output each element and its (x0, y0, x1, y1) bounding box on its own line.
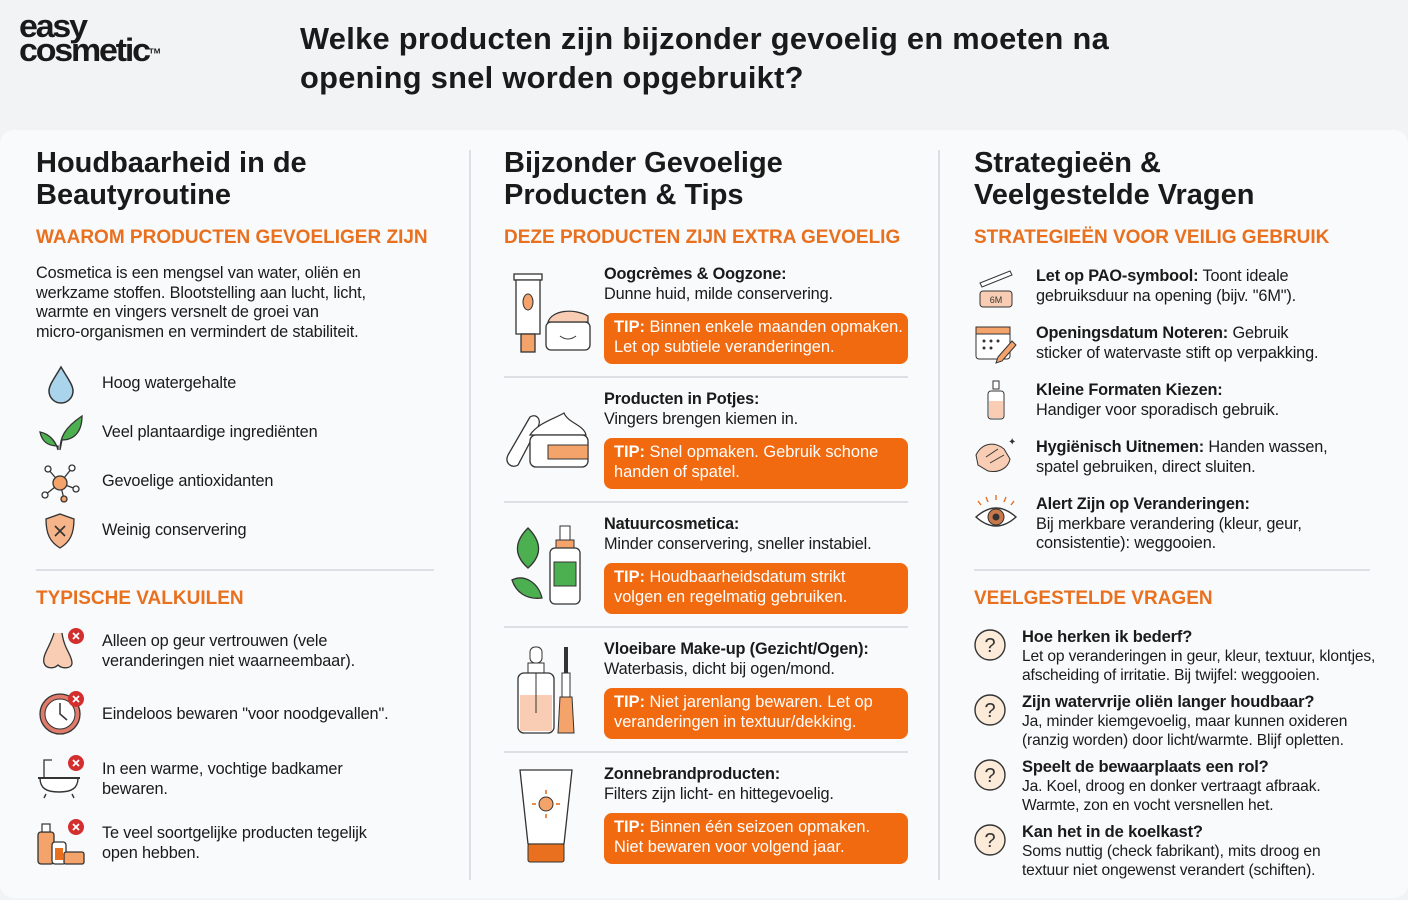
tip: TIP: Binnen enkele maanden opmaken. (614, 318, 903, 336)
faq 3: Warmte, zon en vocht versnellen het. (1022, 797, 1273, 814)
faq 2 (974, 693, 1347, 749)
icon: calendar (976, 326, 1017, 364)
tip: TIP: Houdbaarheidsdatum strikt (614, 568, 845, 586)
list: strategies: gebruiksduur na opening (bijv. "6M"). (1036, 287, 1296, 305)
list: factors (39, 366, 317, 549)
item: zonnebrand (519, 765, 908, 864)
icon: PAO: 6M (990, 295, 1002, 305)
faq 4: ? (984, 830, 996, 852)
item: vloeibare make-up: Waterbasis, dicht bij ogen/mond. (604, 660, 835, 678)
panel: strategieen (974, 147, 1375, 879)
item: potjes (506, 390, 908, 489)
icon: hands (976, 437, 1016, 472)
logo: cosmeticTM (19, 32, 160, 68)
list: valkuilen: bewaren. (102, 780, 168, 798)
item: vloeibare make-up (517, 640, 908, 739)
faq 2: Zijn watervrije oliën langer houdbaar? (1022, 693, 1314, 711)
faq 4: Soms nuttig (check fabrikant), mits droog en (1022, 843, 1320, 860)
faq 4: Kan het in de koelkast? (1022, 823, 1203, 841)
list: strategies: consistentie): weggooien. (1036, 534, 1216, 552)
icon: leaves and bottle (511, 526, 581, 605)
faq 4 (974, 823, 1320, 879)
heading (36, 147, 307, 211)
text block (36, 264, 366, 341)
list: strategies: Hygiënisch Uitnemen: Handen wassen, (1036, 438, 1328, 456)
faq 3: Ja. Koel, droog en donker vertraagt afbraak. (1022, 778, 1321, 795)
item: vloeibare make-up: Vloeibare Make-up (Gezicht/Ogen): (604, 640, 869, 658)
list: strategies: spatel gebruiken, direct sluiten. (1036, 458, 1256, 476)
item: potjes: Vingers brengen kiemen in. (604, 410, 798, 428)
tip: TIP: Niet jarenlang bewaren. Let op (614, 693, 873, 711)
text block: werkzame stoffen. Blootstelling aan lucht, licht, (36, 284, 366, 302)
heading: Houdbaarheid in de (36, 147, 307, 179)
item: natuurcosmetica: Minder conservering, sneller instabiel. (604, 535, 871, 553)
list: strategies: Let op PAO-symbool: Toont ideale (1036, 267, 1288, 285)
icon: molecule (41, 464, 80, 503)
logo (19, 9, 160, 68)
subheading: STRATEGIEËN VOOR VEILIG GEBRUIK (974, 227, 1329, 248)
list: strategies: Bij merkbare verandering (kleur, geur, (1036, 515, 1302, 533)
item: zonnebrand: Zonnebrandproducten: (604, 765, 780, 783)
item: potjes: Producten in Potjes: (604, 390, 759, 408)
subheading: DEZE PRODUCTEN ZIJN EXTRA GEVOELIG (504, 227, 900, 248)
icon: small bottle (988, 380, 1004, 420)
item: zonnebrand: Filters zijn licht- en hittegevoelig. (604, 785, 834, 803)
tip (604, 813, 908, 864)
text block: Cosmetica is een mengsel van water, oliën en (36, 264, 361, 282)
icon: bathtub (38, 755, 84, 798)
list: factors: Weinig conservering (102, 521, 246, 539)
tip: Let op subtiele veranderingen. (614, 338, 835, 356)
list: valkuilen: Te veel soortgelijke producten tegelijk (102, 824, 367, 842)
text block: micro-organismen en vermindert de stabiliteit. (36, 323, 358, 341)
list: strategies: Openingsdatum Noteren: Gebruik (1036, 324, 1288, 342)
text block: warmte en vingers versnelt de groei van (36, 303, 319, 321)
faq 3: ? (984, 765, 996, 787)
panel: houdbaarheid (36, 147, 434, 865)
subheading: WAAROM PRODUCTEN GEVOELIGER ZIJN (36, 227, 428, 248)
subheading: faq: VEELGESTELDE VRAGEN (974, 588, 1213, 609)
faq 1: afscheiding of irritatie. Bij twijfel: weggooien. (1022, 667, 1320, 684)
faq 1: Let op veranderingen in geur, kleur, textuur, klontjes, (1022, 648, 1375, 665)
list: strategies: Kleine Formaten Kiezen: (1036, 381, 1223, 399)
tip (604, 688, 908, 739)
tip: TIP: Binnen één seizoen opmaken. (614, 818, 870, 836)
item: oogcremes (513, 265, 908, 364)
icon: PAO (979, 270, 1013, 308)
icon: eye cream (513, 273, 591, 353)
list: strategies: Alert Zijn op Veranderingen: (1036, 495, 1250, 513)
faq 2: ? (984, 700, 996, 722)
list: valkuilen: Eindeloos bewaren "voor noodgevallen". (102, 705, 388, 723)
list: strategies: Handiger voor sporadisch gebruik. (1036, 401, 1279, 419)
list: valkuilen: veranderingen niet waarneembaar). (102, 652, 355, 670)
faq 4: textuur niet ongewenst verandert (schiften). (1022, 862, 1315, 879)
faq 3 (974, 758, 1321, 814)
item: natuurcosmetica (511, 515, 908, 614)
tip (604, 313, 908, 364)
icon: bottles (37, 819, 85, 865)
icon: dropper and mascara (517, 646, 574, 734)
panel: gevoelige producten (504, 147, 908, 864)
icon: eye (975, 495, 1017, 527)
tip: Niet bewaren voor volgend jaar. (614, 838, 845, 856)
list: strategies: sticker of watervaste stift op verpakking. (1036, 344, 1318, 362)
list: valkuilen: In een warme, vochtige badkamer (102, 760, 343, 778)
faq 3: Speelt de bewaarplaats een rol? (1022, 758, 1269, 776)
heading (504, 147, 783, 211)
title: Welke producten zijn bijzonder gevoelig en moeten na (300, 21, 1109, 56)
heading: Producten & Tips (504, 179, 744, 211)
subheading: valkuilen: TYPISCHE VALKUILEN (36, 588, 244, 609)
list: valkuilen: open hebben. (102, 844, 200, 862)
icon: drop (48, 366, 74, 404)
icon: shield (45, 513, 75, 549)
icon: leaf (39, 414, 83, 450)
icon: hands: ✦ (1008, 437, 1016, 448)
icon: sunscreen tube (519, 769, 573, 862)
title (300, 21, 1109, 95)
tip (604, 438, 908, 489)
list: factors: Gevoelige antioxidanten (102, 472, 273, 490)
faq 1: Hoe herken ik bederf? (1022, 628, 1192, 646)
item: oogcremes: Oogcrèmes & Oogzone: (604, 265, 786, 283)
faq 1 (974, 628, 1375, 684)
icon: nose (43, 628, 84, 668)
tip: veranderingen in textuur/dekking. (614, 712, 856, 730)
tip (604, 563, 908, 614)
heading (974, 147, 1254, 211)
tip: handen of spatel. (614, 462, 740, 480)
list: faq (974, 628, 1375, 879)
logo: easy (19, 9, 86, 45)
list: factors: Hoog watergehalte (102, 374, 236, 392)
list: valkuilen: Alleen op geur vertrouwen (vele (102, 632, 327, 650)
icon: jar (506, 412, 589, 468)
heading: Bijzonder Gevoelige (504, 147, 783, 179)
list: factors: Veel plantaardige ingrediënten (102, 423, 317, 441)
item: oogcremes: Dunne huid, milde conservering. (604, 285, 833, 303)
tip: volgen en regelmatig gebruiken. (614, 588, 847, 606)
heading: Beautyroutine (36, 179, 231, 211)
heading: Strategieën & (974, 147, 1161, 179)
heading: Veelgestelde Vragen (974, 179, 1254, 211)
tip: TIP: Snel opmaken. Gebruik schone (614, 443, 878, 461)
faq 1: ? (984, 635, 996, 657)
title: opening snel worden opgebruikt? (300, 60, 804, 95)
list: valkuilen (37, 628, 388, 865)
item: natuurcosmetica: Natuurcosmetica: (604, 515, 739, 533)
faq 2: (ranzig worden) door licht/warmte. Blijf opletten. (1022, 732, 1344, 749)
icon: clock (39, 691, 84, 735)
list: strategies (975, 267, 1328, 552)
faq 2: Ja, minder kiemgevoelig, maar kunnen oxideren (1022, 713, 1347, 730)
